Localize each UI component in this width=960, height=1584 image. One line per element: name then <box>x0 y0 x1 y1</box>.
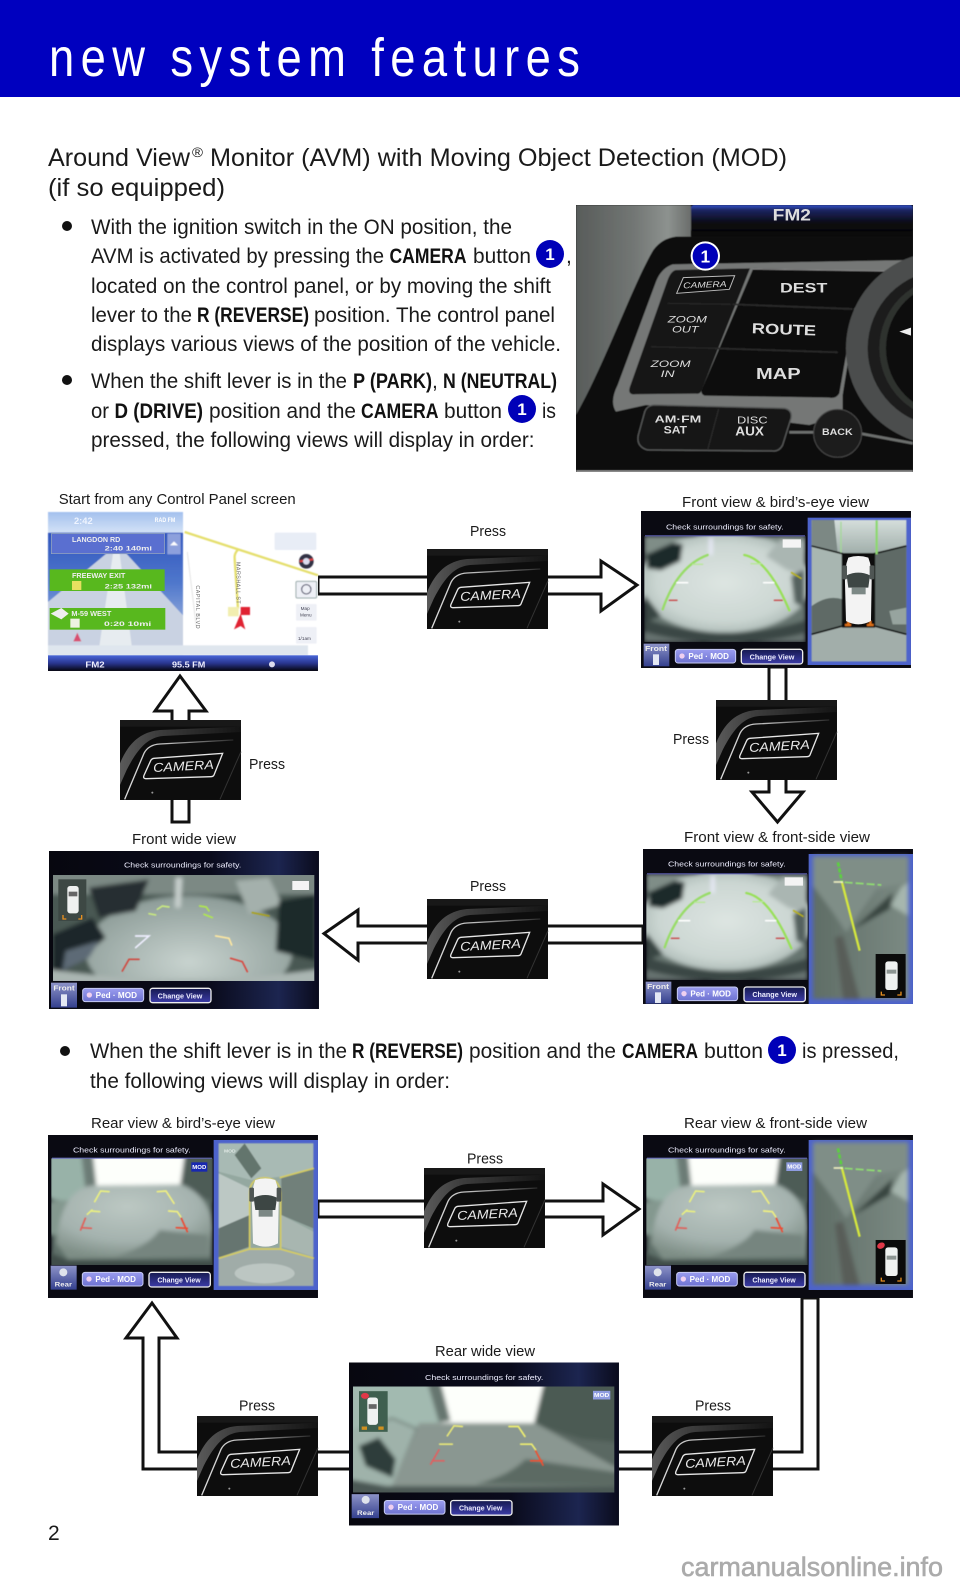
controls: Change View <box>459 1503 502 1512</box>
M-59 west box: 0:20 10mi <box>104 621 152 628</box>
section heading: Monitor (AVM) with Moving Object Detection (MOD) <box>210 144 787 172</box>
controls: Ped · MOD <box>95 1275 136 1284</box>
bullet text: activating AVM: lever to the <box>91 304 192 327</box>
controls: Rear <box>357 1510 375 1517</box>
bullet text: activating AVM: CAMERA <box>390 245 466 268</box>
camera button bottom: CAMERA <box>460 937 521 954</box>
label: rear and front-side: Rear view & front-side view <box>684 1115 867 1132</box>
camera button rear bottom left <box>197 1416 318 1496</box>
bullet text: activating AVM: 1 <box>545 245 555 264</box>
screen: navigation map <box>48 512 318 671</box>
freeway exit box <box>50 569 165 591</box>
header banner <box>0 0 960 97</box>
bullet text: P N D positions: P (PARK) <box>353 370 432 393</box>
screen: front wide view <box>49 851 319 1009</box>
bullet text: activating AVM: located on the control panel, or by moving the shift <box>91 275 551 298</box>
camera button top <box>427 549 548 629</box>
route box: LANGDON RD <box>72 535 120 544</box>
bullet text: activating AVM: position. The control panel <box>314 304 555 327</box>
controls: Ped · MOD <box>398 1503 439 1512</box>
controls: Change View <box>158 991 202 1000</box>
panel button labels: DISC <box>737 416 768 427</box>
bullet text: activating AVM: AVM is activated by pressing the <box>91 245 384 268</box>
camera button left: CAMERA <box>153 758 214 775</box>
screen: front view and front-side view <box>639 849 913 1004</box>
map street labels: Map <box>301 606 310 611</box>
bullet text: P N D positions: position and the <box>209 400 356 423</box>
bullet text: P N D positions: 1 <box>517 400 527 419</box>
arrow: bird's-eye to front-side view <box>752 667 803 822</box>
arrow: front-side to front wide view <box>324 910 643 960</box>
camera button bottom <box>427 899 548 979</box>
camera button rear bottom left: CAMERA <box>230 1454 291 1471</box>
screen: front view and front-side view: Check surroundings for safety. <box>668 860 786 869</box>
MOD tag: MOD <box>594 1393 609 1399</box>
M-59 west box: M-59 WEST <box>71 609 112 618</box>
screen: rear view and front-side view: Check surroundings for safety. <box>668 1145 786 1154</box>
arrow: rear bird's-eye to rear front-side <box>318 1184 639 1235</box>
screen: rear view and bird's-eye view <box>48 1135 318 1298</box>
bird's-eye panel: MOD <box>224 1148 236 1154</box>
bullet text: activating AVM: R (REVERSE) <box>197 304 309 327</box>
arrow: rear front-side through rear wide back to rear bird's-eye <box>126 1298 818 1469</box>
panel button labels: ROUTE <box>752 321 817 340</box>
bullet text: activating AVM: displays various views of the position of the vehicle. <box>91 333 561 356</box>
press label rear top: Press <box>467 1150 503 1168</box>
section heading: Around View <box>48 144 191 172</box>
panel button labels: BACK <box>822 427 853 437</box>
bullet text: reverse position: is pressed, <box>802 1040 899 1063</box>
press label left: Press <box>249 756 285 773</box>
status bar: FM2 <box>85 660 105 669</box>
bullet text: reverse position: button <box>704 1040 763 1063</box>
MOD tag: MOD <box>192 1165 206 1171</box>
press label rear bottom right: Press <box>695 1398 731 1414</box>
panel button labels: DEST <box>780 280 828 296</box>
inset car <box>58 879 86 921</box>
press label rear bottom left: Press <box>239 1398 275 1414</box>
controls: Ped · MOD <box>96 991 137 1000</box>
arrow: nav screen to front and bird's-eye view <box>318 561 637 611</box>
bullet text: reverse position <box>60 1036 899 1093</box>
controls <box>644 644 803 666</box>
label: rear wide: Rear wide view <box>435 1343 535 1360</box>
panel button labels: IN <box>661 369 675 379</box>
section heading: (if so equipped) <box>48 174 225 202</box>
screen: rear view and front-side view <box>643 1135 913 1298</box>
press label top: Press <box>470 523 506 540</box>
map street labels: 1/1am <box>298 636 311 641</box>
bullet text: P N D positions: , <box>432 370 438 393</box>
camera button top: CAMERA <box>460 587 521 604</box>
controls: Ped · MOD <box>690 1275 731 1284</box>
moving object marker <box>876 1241 886 1250</box>
screen: rear view and bird's-eye view: Check surroundings for safety. <box>73 1145 191 1154</box>
camera button rear bottom right <box>652 1416 773 1496</box>
camera button rear top: CAMERA <box>457 1206 518 1223</box>
watermark: carmanualsonline.info <box>681 1552 943 1582</box>
status bar <box>48 655 318 671</box>
status bar: 95.5 FM <box>172 660 206 669</box>
bird's-eye panel <box>214 1140 318 1290</box>
screen: front view and bird's-eye view <box>637 511 911 668</box>
camera button rear top <box>424 1168 545 1248</box>
bullet text: reverse position: position and the <box>469 1040 616 1063</box>
panel button labels: MAP <box>756 366 801 383</box>
M-59 west box <box>50 608 165 630</box>
screen: front view and bird's-eye view: Check surroundings for safety. <box>666 522 784 531</box>
panel button labels: ZOOM <box>649 359 691 369</box>
map street labels: Menu <box>300 613 312 618</box>
screen: front wide view: Check surroundings for safety. <box>124 861 241 870</box>
bullet text: reverse position: When the shift lever is in the <box>90 1040 347 1063</box>
bullet text: P N D positions: button <box>444 400 502 423</box>
controls: Change View <box>752 1275 796 1284</box>
camera button right: CAMERA <box>749 738 810 755</box>
MOD tag <box>593 1391 610 1399</box>
bullet text: activating AVM <box>62 216 572 356</box>
time: 2:42 <box>74 516 93 526</box>
bullet text: P N D positions: D (DRIVE) <box>114 400 203 423</box>
bullet text: activating AVM: , <box>566 245 572 268</box>
bullet text: P N D positions: CAMERA <box>361 400 438 423</box>
callout number <box>692 242 719 270</box>
freeway exit box: 2:25 132mi <box>105 583 152 590</box>
map street labels: CAPITAL BLVD <box>194 585 200 629</box>
label: front and bird's-eye: Front view & bird’s-eye view <box>682 494 869 511</box>
bullet text: P N D positions: is <box>542 400 556 423</box>
section heading: ® <box>192 144 204 160</box>
camera button rear bottom right: CAMERA <box>685 1454 746 1471</box>
label: front and front-side: Front view & front-side view <box>684 829 870 846</box>
title: new system features <box>49 27 580 88</box>
bullet text: activating AVM: With the ignition switch in the ON position, the <box>91 216 512 239</box>
freeway exit box: FREEWAY EXIT <box>72 571 126 580</box>
bullet text: P N D positions: When the shift lever is in the <box>91 370 347 393</box>
controls: Front <box>53 983 75 992</box>
map street labels <box>194 562 312 641</box>
panel button labels: OUT <box>672 324 701 334</box>
bullet text: reverse position: 1 <box>777 1041 787 1060</box>
controls <box>352 1494 512 1518</box>
controls: Change View <box>752 990 797 999</box>
controls <box>51 1266 210 1290</box>
controls: Change View <box>157 1275 201 1284</box>
controls: Ped · MOD <box>688 652 729 661</box>
inset car <box>359 1391 388 1432</box>
controls: Front <box>645 644 668 653</box>
MOD tag: MOD <box>787 1165 801 1171</box>
controls: Ped · MOD <box>690 990 731 999</box>
bullet text: reverse position: CAMERA <box>622 1040 698 1063</box>
FM2 label: FM2 <box>773 205 811 224</box>
route box: 2:40 140mi <box>105 546 152 553</box>
bullet text: activating AVM: button <box>473 245 531 268</box>
photo: control panel <box>576 205 913 472</box>
route box <box>51 534 165 554</box>
controls <box>51 983 211 1008</box>
screen: rear wide view: Check surroundings for safety. <box>425 1373 543 1382</box>
section heading <box>48 144 787 202</box>
controls: Rear <box>55 1282 73 1289</box>
page number: 2 <box>48 1522 60 1545</box>
label: start screen: Start from any Control Panel screen <box>59 491 296 508</box>
label: front wide: Front wide view <box>132 831 236 848</box>
label: rear and bird's-eye: Rear view & bird’s-eye view <box>91 1115 275 1132</box>
controls: Front <box>647 982 670 991</box>
controls: Rear <box>649 1282 667 1289</box>
controls <box>645 1266 805 1290</box>
panel button labels: CAMERA <box>683 279 727 290</box>
panel button labels: ZOOM <box>666 315 708 325</box>
bullet text: P N D positions: pressed, the following views will display in order: <box>91 429 534 452</box>
press label right: Press <box>673 731 709 748</box>
screen: rear wide view <box>349 1362 619 1525</box>
arrow: front wide to nav screen <box>155 676 206 822</box>
panel button labels <box>649 276 853 439</box>
camera button left <box>120 720 241 800</box>
bullet text: reverse position: R (REVERSE) <box>352 1040 463 1063</box>
bullet text: P N D positions: N (NEUTRAL) <box>443 370 557 393</box>
press label bottom: Press <box>470 878 506 895</box>
bullet text: P N D positions <box>62 370 557 452</box>
controls <box>646 982 805 1004</box>
camera button right <box>716 700 837 780</box>
callout number: 1 <box>701 246 711 266</box>
panel button labels: AM·FM <box>655 415 701 426</box>
map street labels: MARSHALL ST <box>235 562 241 604</box>
bullet text: reverse position: the following views will display in order: <box>90 1070 450 1093</box>
panel button labels: SAT <box>664 425 687 437</box>
screen: navigation map: RAD FM <box>155 518 175 524</box>
MOD tag <box>786 1162 802 1171</box>
bullet text: P N D positions: or <box>91 400 109 423</box>
panel button labels: AUX <box>735 425 765 439</box>
MOD tag <box>191 1162 207 1172</box>
controls: Change View <box>750 652 794 661</box>
